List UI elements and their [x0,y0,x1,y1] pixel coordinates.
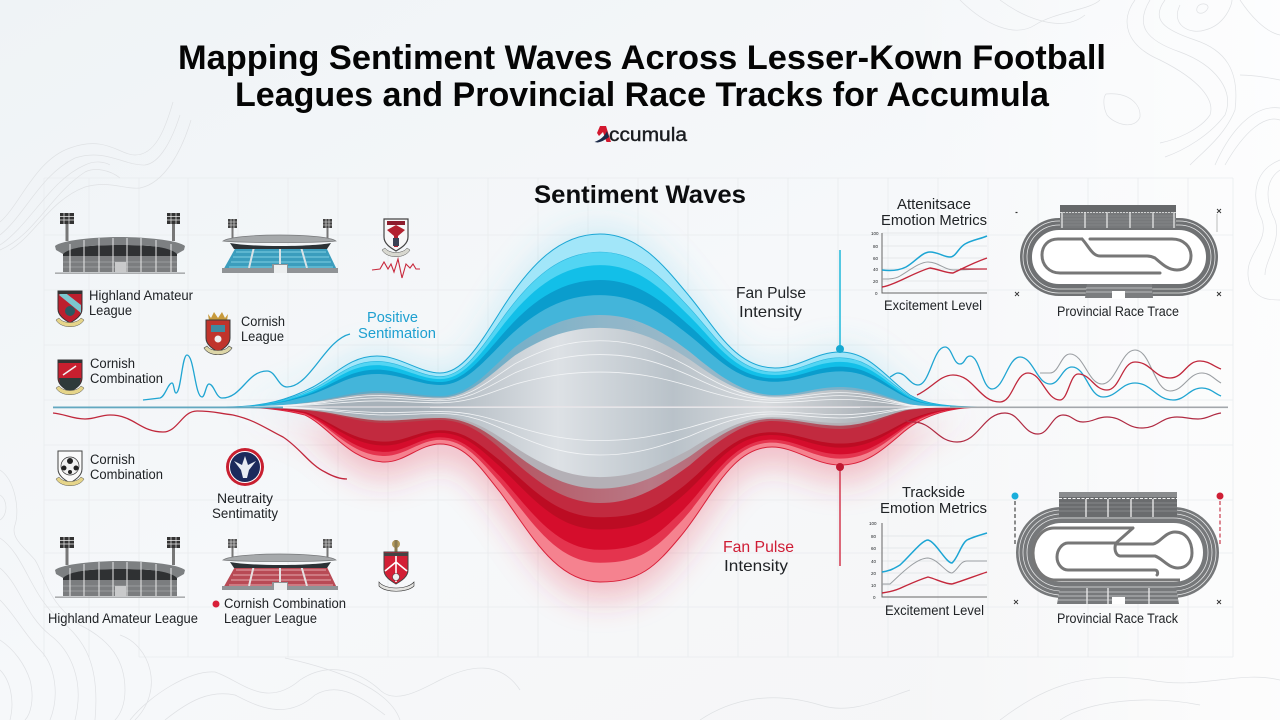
label: negative fan pulse intensity: Fan Pulse [723,539,794,556]
label: Cornish League: League [241,329,284,344]
label: Cornish League: Cornish [241,314,285,329]
positive wave bands [225,234,985,407]
label: excitement level upper: Excitement Level [884,298,982,313]
icon: grey stadium bottom [55,537,185,598]
left line chart: blue sentiment [143,334,350,400]
chart: trackside emotion metrics: 100 [869,521,877,526]
label: positive sentiment [358,309,436,342]
chart: trackside emotion metrics: 80 [871,534,877,539]
label: positive fan pulse intensity: Fan Pulse [736,285,806,302]
label: negative fan pulse intensity: Intensity [724,558,788,575]
title: Mapping Sentiment Waves Across Lesser-Kown Football [178,39,1106,77]
label: negative fan pulse intensity [723,539,794,575]
crest: Cornish League [204,312,232,355]
label: Cornish Combination Leaguer League: Leaguer League [224,611,317,626]
label: positive sentiment: Positive [367,309,418,326]
right line: red sentiment [917,361,1221,402]
main sentiment wave [225,227,985,599]
title [178,39,1106,114]
label: neutral sentiment: Neutraity [217,491,273,506]
chart: trackside emotion metrics: 40 [871,559,877,564]
title: Leagues and Provincial Race Tracks for Accumula [235,76,1050,114]
crest: Cornish Combination upper [56,360,84,395]
label: positive fan pulse intensity [736,285,806,321]
chart: attendance emotion metrics: 40 [873,267,879,272]
label: Cornish Combination Leaguer League [212,596,346,626]
label: provincial race track: Provincial Race Track [1057,611,1178,626]
chart: attendance emotion metrics: 20 [873,279,879,284]
chart: attendance emotion metrics: 60 [873,256,879,261]
chart: trackside emotion metrics: 20 [871,571,877,576]
label: Highland Amateur League: Highland Amateur [89,288,193,303]
label: attendance emotion metrics: Attenitsace [897,196,971,213]
crest: Highland Amateur League [56,291,84,327]
label: neutral sentiment: Sentimatity [212,506,278,521]
label: Cornish League [241,314,285,344]
icon: provincial race track lower [1012,492,1224,604]
label: Highland Amateur League [89,288,193,318]
chart: trackside emotion metrics: 60 [871,546,877,551]
icon: top crest with pulse [372,219,420,278]
left line chart: red sentiment [53,411,347,479]
label: trackside emotion metrics: Trackside [902,484,965,501]
chart: attendance emotion metrics: 0 [875,291,878,296]
icon: bottom red crest [379,540,414,591]
chart: trackside emotion metrics: 0 [873,595,876,600]
chart: attendance emotion metrics: 80 [873,244,879,249]
wave glow [225,227,985,599]
label: neutral sentiment [212,491,278,521]
label: Cornish Combination upper [90,356,163,386]
label: Cornish Combination upper: Cornish [90,356,135,371]
crest: neutral sentiment roundel [226,448,264,486]
label: trackside emotion metrics [880,484,987,517]
label: positive sentiment: Sentimation [358,325,436,342]
chart: attendance emotion metrics [871,231,987,296]
label: Cornish Combination upper: Combination [90,371,163,386]
label: Highland Amateur League bottom: Highland Amateur League [48,611,198,626]
callout marker: negative fan pulse [836,463,844,566]
label: Cornish Combination Leaguer League: Cornish Combination [224,596,346,611]
icon: red stadium [222,539,338,590]
heading: Sentiment Waves: Sentiment Waves [534,181,746,209]
negative wave bands [225,407,985,582]
label: Highland Amateur League: League [89,303,132,318]
callout marker: positive fan pulse [836,250,844,353]
icon: provincial race track upper [1015,205,1221,299]
label: positive fan pulse intensity: Intensity [739,304,802,321]
label: Cornish Combination lower: Combination [90,467,163,482]
icon: blue stadium [222,219,338,273]
label: provincial race trace: Provincial Race Trace [1057,304,1179,319]
crest: Cornish Combination lower [56,451,84,486]
label: Cornish Combination lower: Cornish [90,452,135,467]
label: attendance emotion metrics: Emotion Metrics [881,212,987,229]
icon: grey stadium top [55,213,185,274]
right line: blue sentiment [890,347,1221,400]
right line: lower red sentiment [905,413,1221,442]
chart: attendance emotion metrics: 100 [871,231,879,236]
chart: trackside emotion metrics: 10 [871,583,877,588]
chart: trackside emotion metrics [869,521,987,600]
label: excitement level lower: Excitement Level [885,603,984,618]
baseline axis [53,406,1228,408]
label: attendance emotion metrics [881,196,987,229]
label: Cornish Combination lower [90,452,163,482]
label: trackside emotion metrics: Emotion Metrics [880,500,987,517]
right line: grey sentiment [1040,350,1221,391]
